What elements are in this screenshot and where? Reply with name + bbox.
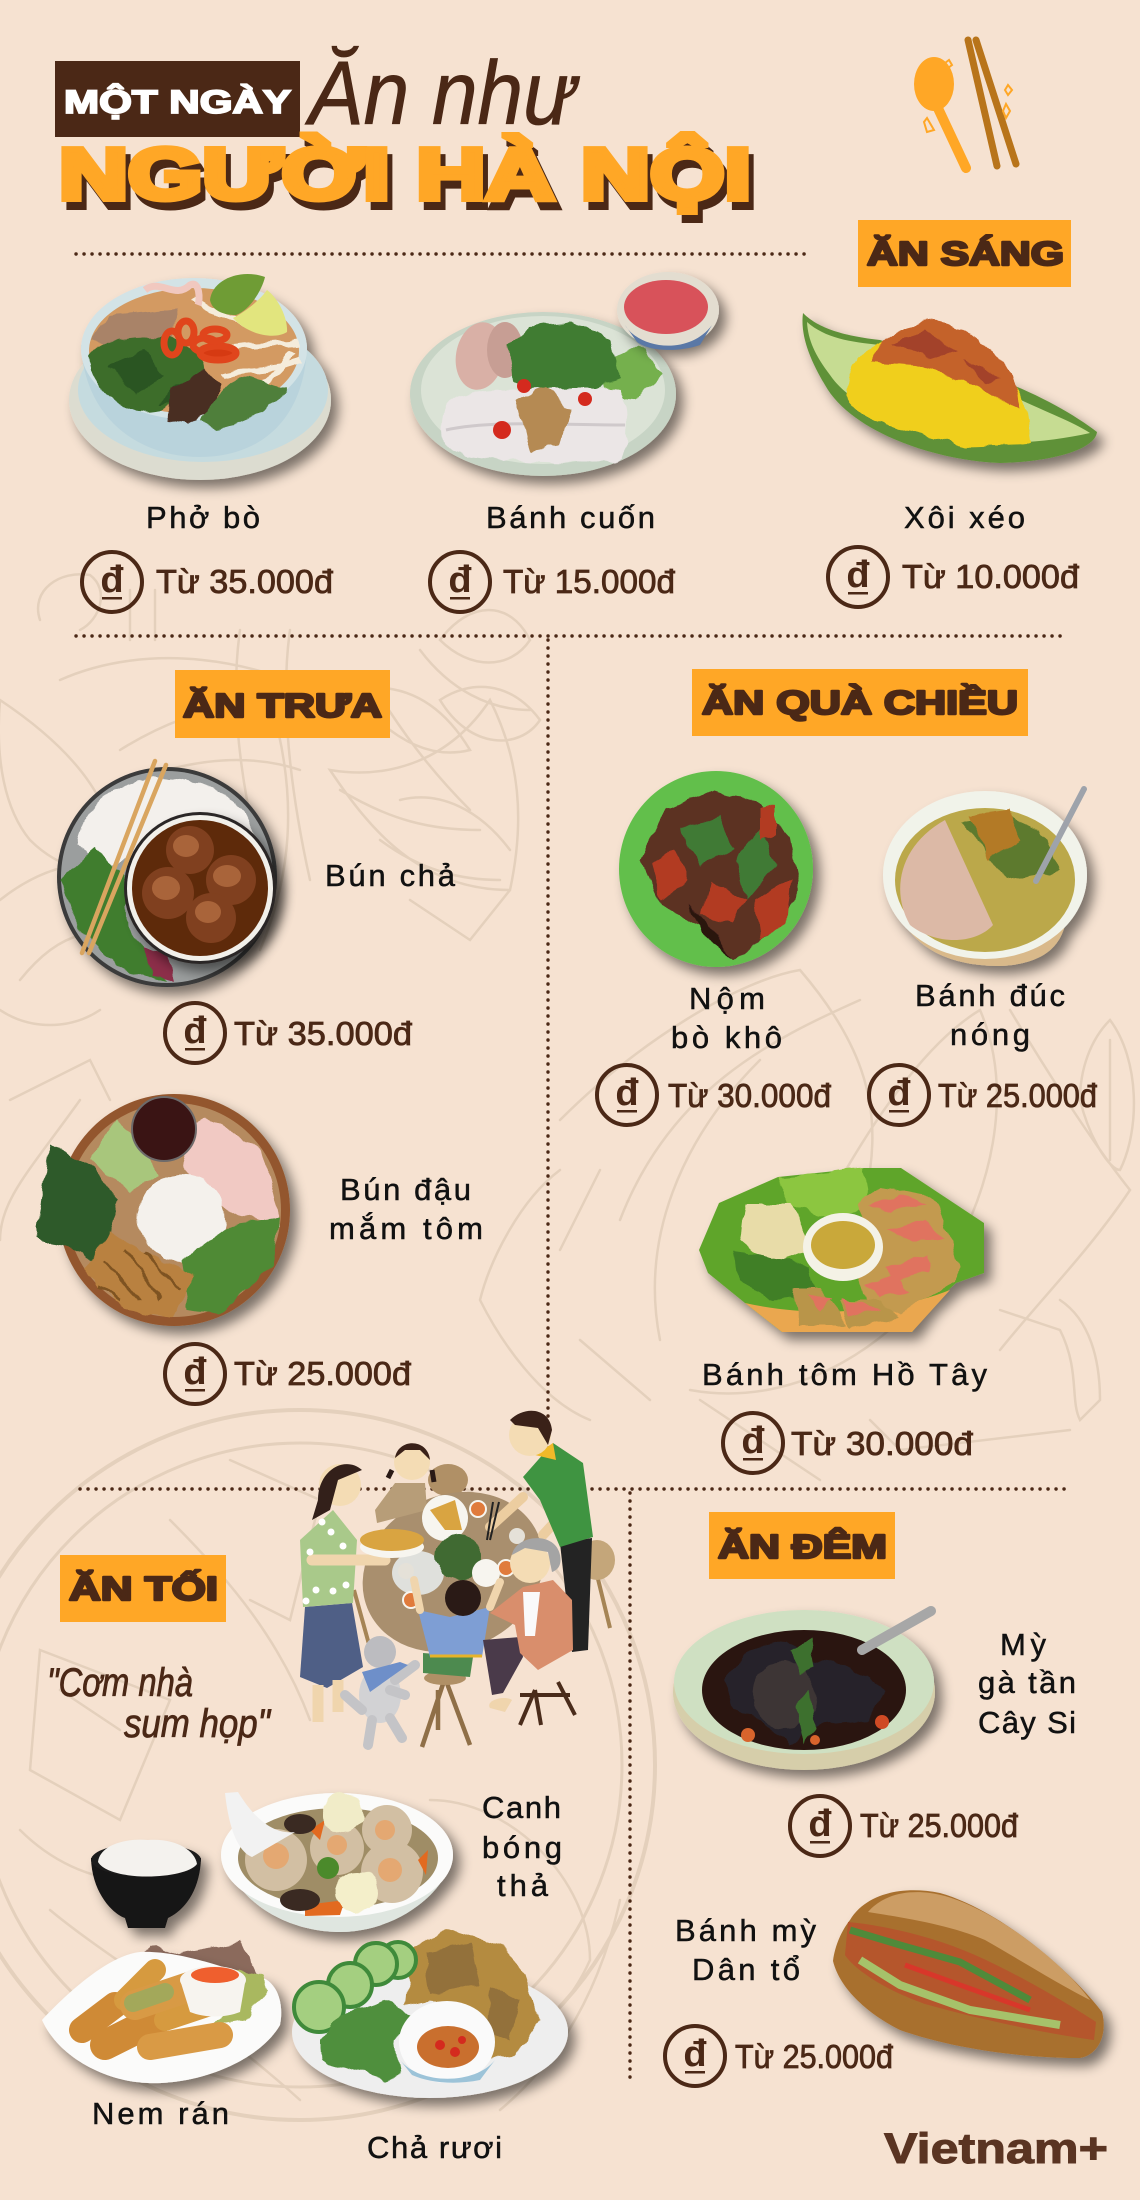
label: bún đậu mắm tôm — [329, 1172, 483, 1246]
price: xôi xéo: Từ 10.000đ — [902, 558, 1080, 595]
title main: Người Hà Nội — [59, 134, 756, 223]
table dishes — [392, 1495, 525, 1608]
food: bánh mỳ dân tổ — [833, 1890, 1104, 2058]
food: bánh đúc nóng — [883, 789, 1087, 966]
label: mỳ gà tần cây si: Mỳ — [1000, 1627, 1046, 1662]
label: canh bóng thả: Canh — [482, 1790, 561, 1825]
price: bún chả — [165, 1003, 413, 1063]
label: bánh tôm hồ tây: Bánh tôm Hồ Tây — [702, 1357, 988, 1392]
food: bánh cuốn — [410, 272, 719, 476]
price: mỳ gà tần: Từ 25.000đ — [860, 1807, 1019, 1844]
label: nem rán: Nem rán — [92, 2096, 229, 2131]
price: mỳ gà tần — [790, 1796, 1019, 1856]
label: nộm bò khô — [671, 981, 782, 1055]
heading: ăn sáng: ĂN SÁNG — [867, 235, 1064, 272]
heading: ăn đêm: ĂN ĐÊM — [718, 1528, 887, 1565]
stools behind — [354, 1464, 615, 1648]
label: bánh đúc nóng: Bánh đúc — [915, 978, 1065, 1013]
price: bún đậu: đ — [183, 1351, 207, 1393]
person: girl — [375, 1443, 434, 1523]
icon: spoon and chopsticks — [914, 40, 1016, 168]
panel: ăn tối — [42, 1411, 615, 2165]
title block — [55, 44, 756, 223]
price: bún đậu — [165, 1344, 412, 1404]
price: nộm bò khô — [597, 1065, 832, 1125]
label: bún đậu mắm tôm: mắm tôm — [329, 1211, 483, 1246]
person: boy from behind — [414, 1580, 500, 1747]
title badge: Một ngày: MỘT NGÀY — [64, 84, 291, 120]
price: bánh mỳ — [665, 2026, 894, 2086]
label: canh bóng thả: bóng — [482, 1830, 562, 1865]
price: bún chả: đ — [183, 1010, 207, 1052]
label: canh bóng thả: thả — [497, 1868, 549, 1903]
food: phở bò — [69, 274, 331, 480]
price: bún đậu: Từ 25.000đ — [234, 1355, 412, 1392]
price: nộm bò khô: đ — [615, 1072, 639, 1114]
food: bún đậu mắm tôm — [36, 1094, 290, 1326]
table — [336, 1463, 570, 1681]
label: chả rươi: Chả rươi — [367, 2130, 502, 2165]
price: bánh đúc nóng: đ — [887, 1072, 911, 1114]
logo: vietnam+: Vietnam+ — [884, 2125, 1108, 2173]
person: man in green shirt — [490, 1411, 593, 1652]
price: bánh tôm hồ tây — [723, 1413, 974, 1473]
label: mỳ gà tần cây si — [978, 1627, 1076, 1740]
price: mỳ gà tần: đ — [808, 1803, 832, 1845]
label: bún chả: Bún chả — [325, 858, 456, 893]
panel: ăn đêm — [665, 1512, 1104, 2086]
quote: cơm nhà sum họp: sum họp" — [124, 1702, 272, 1746]
label: mỳ gà tần cây si: gà tần — [978, 1665, 1076, 1700]
price: bánh mỳ: Từ 25.000đ — [735, 2038, 894, 2075]
panel: ăn quà chiều — [597, 669, 1098, 1473]
label: bánh mỳ dân tổ — [675, 1913, 816, 1987]
food: mỳ gà tần — [673, 1610, 935, 1770]
label: bánh mỳ dân tổ: Bánh mỳ — [675, 1913, 816, 1948]
label: bánh đúc nóng — [915, 978, 1065, 1052]
food: bánh tôm hồ tây — [699, 1168, 984, 1332]
quote: cơm nhà sum họp — [47, 1661, 272, 1746]
person: woman holding plate — [300, 1464, 424, 1722]
heading: ăn quà chiều — [692, 669, 1028, 736]
food: nộm bò khô — [619, 771, 813, 967]
food: xôi xéo — [802, 313, 1097, 463]
heading: ăn tối: ĂN TỐI — [69, 1569, 218, 1607]
food: canh bóng thả — [221, 1792, 453, 1932]
label: nộm bò khô: bò khô — [671, 1020, 782, 1055]
food: nem rán — [42, 1940, 281, 2083]
price: phở bò: Từ 35.000đ — [156, 563, 334, 600]
panel: ăn sáng — [69, 220, 1097, 612]
heading: ăn tối — [60, 1555, 226, 1622]
price: xôi xéo: đ — [846, 554, 870, 596]
label: mỳ gà tần cây si: Cây Si — [978, 1705, 1076, 1740]
price: bún chả: Từ 35.000đ — [234, 1015, 413, 1052]
food: bún chả — [57, 761, 277, 987]
label: canh bóng thả — [482, 1790, 562, 1903]
label: bánh cuốn: Bánh cuốn — [486, 500, 655, 535]
price: bánh đúc nóng: Từ 25.000đ — [938, 1077, 1098, 1114]
price: bánh tôm hồ tây: đ — [741, 1420, 765, 1462]
heading: ăn trưa: ĂN TRƯA — [183, 687, 382, 724]
price: bánh tôm hồ tây: Từ 30.000đ — [791, 1425, 974, 1462]
price: bánh cuốn — [430, 552, 676, 612]
heading: ăn trưa — [175, 670, 390, 738]
title badge: Một ngày — [55, 61, 300, 137]
dog — [345, 1636, 415, 1745]
title main: Người Hà Nội: NGƯỜI HÀ NỘI — [64, 142, 756, 223]
label: nộm bò khô: Nộm — [689, 981, 765, 1016]
label: phở bò: Phở bò — [146, 500, 260, 535]
price: bánh mỳ: đ — [683, 2033, 707, 2075]
price: xôi xéo — [828, 547, 1080, 607]
food: rice bowl — [91, 1840, 201, 1928]
illustration: family dinner — [300, 1411, 615, 1747]
price: phở bò — [82, 552, 334, 612]
price: bánh đúc nóng — [869, 1065, 1098, 1125]
price: phở bò: đ — [100, 559, 124, 601]
price: bánh cuốn: đ — [448, 559, 472, 601]
title script: Ăn như: Ăn như — [304, 44, 580, 144]
label: bánh đúc nóng: nóng — [950, 1017, 1030, 1052]
price: nộm bò khô: Từ 30.000đ — [668, 1077, 832, 1114]
panel: ăn trưa — [36, 670, 483, 1404]
label: bánh mỳ dân tổ: Dân tổ — [692, 1952, 800, 1987]
price: bánh cuốn: Từ 15.000đ — [503, 563, 676, 600]
divider lines — [76, 254, 1068, 2080]
background line art — [0, 574, 1134, 2120]
label: xôi xéo: Xôi xéo — [904, 500, 1025, 535]
food: chả rươi — [292, 1928, 568, 2098]
heading: ăn sáng — [858, 220, 1071, 287]
label: bún đậu mắm tôm: Bún đậu — [340, 1172, 471, 1207]
heading: ăn quà chiều: ĂN QUÀ CHIỀU — [702, 684, 1018, 721]
title main: Người Hà Nội: NGƯỜI HÀ NỘI — [59, 134, 751, 215]
heading: ăn đêm — [709, 1512, 895, 1579]
quote: cơm nhà sum họp: "Cơm nhà — [47, 1661, 193, 1705]
person: grandmother — [483, 1538, 575, 1725]
